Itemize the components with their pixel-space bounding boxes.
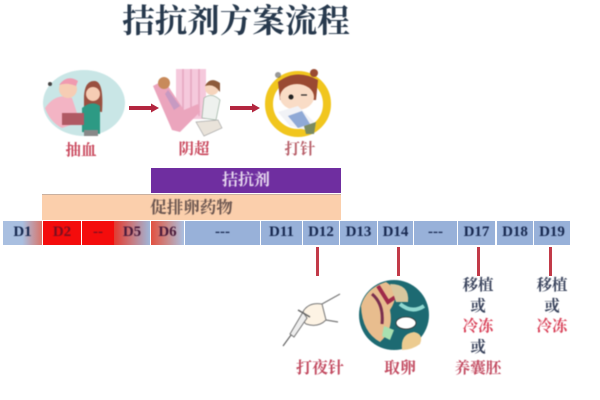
day D12: D12 [308,224,334,240]
icon: ultrasound [152,68,223,137]
or: 或 [544,298,560,315]
icon: trigger shot [282,293,341,347]
icon: injection [264,68,332,138]
day D17 [458,221,495,245]
day D18 [497,221,533,245]
day D5 [114,221,150,245]
day ellipsis [82,221,114,245]
icon: egg retrieval [358,279,430,351]
day D1: D1 [13,224,32,240]
day D11: D11 [269,224,294,240]
day D17: D17 [464,224,489,240]
day D19 [534,221,570,245]
label: trigger shot: 打夜针 [296,360,344,377]
day D13: D13 [346,224,371,240]
day ellipsis: -- [93,224,103,240]
option: freeze: 冷冻 [536,318,568,335]
bar label: antagonist: 拮抗剂 [222,172,270,189]
icon: blood draw [42,70,126,137]
day D19: D19 [539,224,565,240]
bar: antagonist [151,168,341,193]
option: transfer: 移植 [462,277,494,294]
marker line D14 [397,247,400,276]
option: blastocyst culture: 养囊胚 [455,360,501,377]
bar: ovulation drugs [42,194,341,220]
day D6: D6 [158,224,177,240]
day ellipsis [414,221,457,245]
text block: D17 options [454,276,502,377]
label: blood draw: 抽血 [65,142,96,159]
label: injection: 打针 [284,141,316,158]
text block: D19 options [536,276,568,335]
option: transfer: 移植 [536,277,568,294]
day D13 [340,221,377,245]
day ellipsis: --- [428,224,443,240]
marker line D12 [316,247,319,276]
day D2 [43,221,81,245]
day D11 [261,221,302,245]
option: freeze: 冷冻 [462,318,494,335]
day ellipsis [185,221,260,245]
marker line D19 [549,247,552,276]
marker line D17 [477,247,480,276]
or: 或 [470,298,486,315]
day D14: D14 [383,224,408,240]
or: 或 [470,339,486,356]
arrow: ultrasound to injection [230,104,260,112]
day D12 [303,221,339,245]
label: ultrasound: 阴超 [178,141,210,158]
label: egg retrieval: 取卵 [384,360,416,377]
day D2: D2 [53,224,71,240]
day D18: D18 [502,224,528,240]
day D6 [151,221,184,245]
day D14 [378,221,413,245]
day D5: D5 [123,224,141,240]
bar label: ovulation drugs: 促排卵药物 [150,198,233,217]
day D1 [3,221,42,245]
title: 拮抗剂方案流程 [122,4,350,40]
arrow: blood draw to ultrasound [129,104,159,112]
day ellipsis: --- [215,224,230,240]
